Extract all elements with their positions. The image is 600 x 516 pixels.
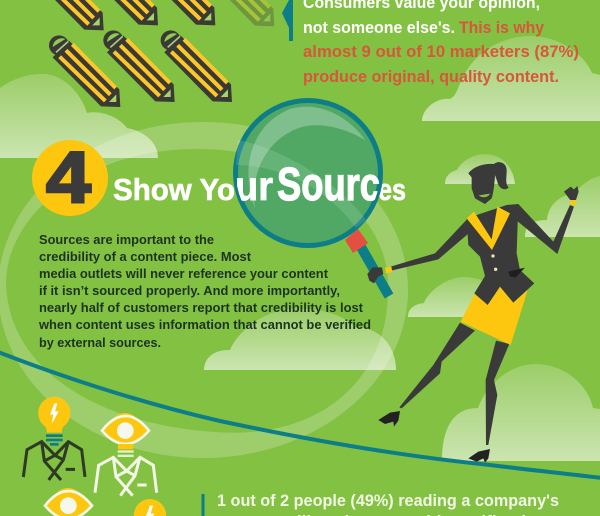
- body text: [38, 232, 371, 350]
- person: eye head cropped: [45, 488, 92, 516]
- gripping hand: [367, 267, 383, 283]
- pencils: [32, 0, 274, 107]
- raised hand: [564, 186, 579, 201]
- ring: pale circular band: [0, 122, 408, 458]
- body text: when content uses information that cannot be verified: [38, 317, 371, 332]
- person: bulb head cropped: [134, 499, 166, 516]
- people icons: [23, 397, 166, 516]
- cloud: bottom right: [442, 364, 600, 461]
- red collar: [345, 229, 368, 253]
- body text: by external sources.: [39, 335, 161, 350]
- callout marker: top: [282, 0, 293, 41]
- cloud: behind raised arm: [525, 176, 600, 237]
- cloud: top right: [422, 36, 600, 121]
- pocket: [508, 268, 525, 277]
- jacket: [467, 204, 534, 305]
- body text: if it isn’t sourced properly. And more importantly,: [39, 283, 340, 298]
- number badge: [32, 138, 108, 218]
- lens: [236, 100, 380, 246]
- heading right part: es: [378, 172, 406, 207]
- body text: credibility of a content piece. Most: [39, 249, 252, 264]
- callout: consumers value: This is why: [459, 18, 544, 37]
- handle: [361, 247, 389, 296]
- callout: consumers value: not someone else's.: [303, 18, 455, 37]
- lens highlight: [248, 107, 365, 208]
- woman on tightrope: [367, 162, 579, 463]
- body text: Sources are important to the: [39, 232, 214, 247]
- lower cuff: [385, 267, 392, 273]
- magnified heading: ur: [235, 163, 273, 209]
- body text: media outlets will never reference your content: [39, 266, 329, 281]
- lens ring reflection: [236, 140, 366, 228]
- callout marker: bottom: [202, 494, 204, 516]
- buttons: [491, 254, 495, 258]
- heading left part: Show Yo: [113, 172, 235, 207]
- pencil row 2: [49, 30, 232, 107]
- cloud: behind head: [445, 154, 515, 184]
- left arm: [391, 219, 469, 271]
- raised cuff: [570, 200, 576, 205]
- magnified heading: Sourc: [277, 158, 380, 210]
- cloud: top left: [0, 74, 158, 158]
- callout: consumers value: produce original, quality content.: [303, 67, 559, 86]
- body text: nearly half of customers report that credibility is lost: [39, 300, 364, 315]
- callout: credibility stat: 1 out of 2 people (49%) reading a company's: [217, 492, 559, 510]
- person: eye head white suit: [95, 413, 157, 496]
- tightrope: [0, 352, 600, 478]
- right arm: [513, 204, 574, 254]
- torso, head and arms: [367, 162, 579, 345]
- magnified heading: [236, 166, 380, 202]
- smile: [479, 194, 490, 197]
- head: [468, 162, 509, 204]
- pencil row 1: [32, 0, 274, 30]
- magnifying glass: [235, 100, 389, 296]
- number badge: 4: [46, 138, 91, 218]
- callout: consumers value: almost 9 out of 10 marketers (87%): [303, 42, 579, 61]
- callout: consumers value: [303, 0, 579, 86]
- person: bulb head dark suit: [23, 397, 85, 480]
- legs and shoes: [378, 323, 509, 463]
- cloud: beside skirt: [408, 277, 490, 317]
- lapels: [467, 207, 510, 250]
- cloud: under body text: [204, 309, 396, 370]
- skirt: [461, 287, 528, 345]
